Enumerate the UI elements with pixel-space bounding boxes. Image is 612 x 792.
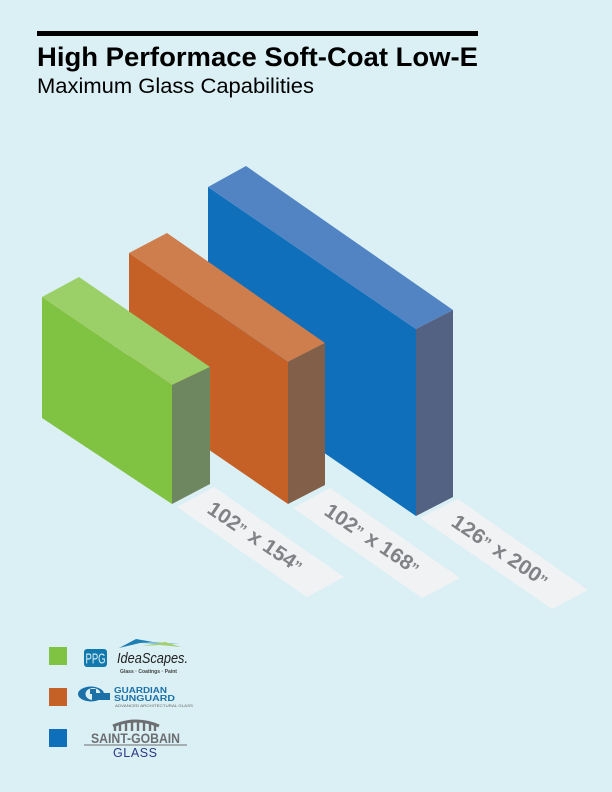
legend logo: PPG IdeaScapes: PPG xyxy=(86,650,106,668)
legend logo: Saint-Gobain Glass: GLASS xyxy=(113,746,157,760)
legend logo: Guardian SunGuard xyxy=(78,686,193,708)
glass block: blue Saint-Gobain xyxy=(208,166,453,516)
legend logo: PPG IdeaScapes xyxy=(84,639,188,675)
legend logo: Saint-Gobain Glass: SAINT-GOBAIN xyxy=(91,730,180,746)
glass block: green PPG xyxy=(42,277,210,504)
size label: 102 x 154: 102” x 154” xyxy=(203,497,307,578)
legend swatch: orange xyxy=(49,688,67,706)
legend logo: Guardian SunGuard: SUNGUARD xyxy=(114,694,175,703)
legend logo: PPG IdeaScapes: IdeaScapes. xyxy=(117,650,188,667)
top rule xyxy=(37,31,478,36)
size label: 102 x 168 xyxy=(293,488,460,598)
legend logo: Saint-Gobain Glass xyxy=(84,721,187,760)
size label: 102 x 168: 102” x 168” xyxy=(320,499,424,580)
legend logo: Guardian SunGuard: ADVANCED ARCHITECTURAL GLASS xyxy=(115,703,193,708)
size label: 126 x 200: 126” x 200” xyxy=(447,510,553,592)
size label: 102 x 154 xyxy=(177,487,344,597)
subtitle: Maximum Glass Capabilities xyxy=(37,75,314,98)
title: High Performace Soft-Coat Low-E xyxy=(37,42,478,72)
legend logo: Guardian SunGuard: GUARDIAN xyxy=(114,686,167,695)
legend logo: PPG IdeaScapes: Glass · Coatings · Paint xyxy=(120,669,177,675)
glass block: orange Guardian xyxy=(129,233,325,504)
size label: 126 x 200 xyxy=(420,499,588,609)
legend swatch: green xyxy=(49,647,67,665)
legend swatch: blue xyxy=(49,729,67,747)
